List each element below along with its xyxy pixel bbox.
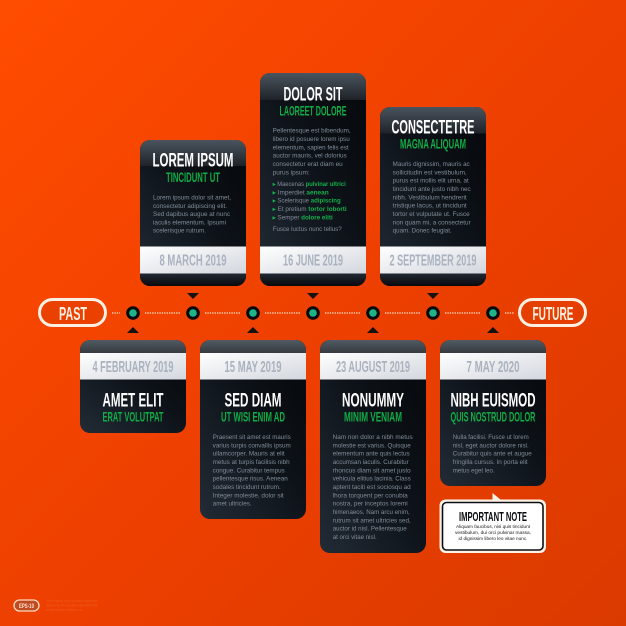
badge: eps-10 [14,600,39,611]
panel: nonummy: lhora torquent per conubia [333,492,408,499]
panel: nonummy: elementum ante quis lectus [333,451,410,458]
panel: sed diam: 15 MAY 2019 [224,359,282,376]
panel: amet elit: AMET ELIT [102,390,164,412]
panel: nonummy: nostra, per inceptos loremi [333,501,408,508]
panel: dolor sit: DOLOR SIT [284,84,343,106]
panel: nonummy: rhoncus diam sit amet justo [333,467,411,474]
panel: lorem ipsum: Lorem ipsum dolor sit amet, [153,195,231,202]
timeline nodes [126,306,500,320]
panel: consectetre: sollicitudin est vestibulum, [393,169,467,176]
panel: nonummy: at orci vitae nisl. [333,534,377,541]
panel: nonummy: 23 AUGUST 2019 [336,359,410,376]
bullet list: ▸ Imperdiet aenean [272,189,329,196]
panel: amet elit: ERAT VOLUTPAT [102,409,164,425]
badge: eps-10: EPS-10 [19,603,34,610]
panel: sed diam: Praesent sit amet est mauris [213,434,291,441]
panel: nonummy: molestie est varius. Quisque [333,442,411,449]
panel: nibh euismod: NIBH EUISMOD [450,390,536,412]
panel: lorem ipsum: TINCIDUNT UT [166,169,220,185]
panel: sed diam: SED DIAM [224,390,282,412]
panel: consectetre [380,107,486,286]
panel: lorem ipsum [140,140,246,286]
footer fine print [46,598,98,612]
panel: nibh euismod: Curabitur quis ante et augue [453,451,532,458]
panel: consectetre: MAGNA ALIQUAM [400,136,466,152]
panel: dolor sit [260,73,366,286]
footer fine print: euismod tincidunt ut [46,607,83,612]
callout: important note: Aliquam faucibus, nisi quis tincidunt [456,524,531,530]
panel: consectetre: non quam mi, a consectetur [393,219,471,226]
panel: dolor sit: Fusce luctus nunc tellus? [273,226,342,233]
bullet list: ▸ Scelerisque adipiscing [272,198,341,205]
label: future [520,300,586,326]
panel: nibh euismod: fringilla cursus. In porta elit [453,459,528,466]
callout: important note: vestibulum, dui orci pulvinar massa, [455,530,531,536]
bullet list [272,181,347,221]
panel: nibh euismod: 7 MAY 2020 [466,359,520,376]
panel: consectetre: 2 SEPTEMBER 2019 [390,252,477,270]
panel: nibh euismod: nisl, eget auctor dolore nisl. [453,442,529,449]
panel: nibh euismod: metus eget leo. [453,467,495,474]
panel: sed diam: amet ultricies. [213,501,252,508]
panel: nonummy: vehicula elitius lacinia. Class [333,476,411,483]
panel: lorem ipsum: consectetur adipiscing elit. [153,203,227,210]
bullet list: ▸ Et pretium tortor loborti [272,206,347,213]
panel: amet elit [80,340,186,433]
panel: dolor sit: consectetur erat diam eu [273,161,343,168]
callout: important note: id dignissim libero leo vitae nunc. [458,536,528,542]
panel: sed diam: Integer molestie, dolor sit [213,492,284,499]
panel: dolor sit: 16 JUNE 2019 [283,252,343,270]
panel: nonummy: rutrum sit amet ultricies sed, [333,517,411,524]
panel: nonummy: auctor id nisl. Pellentesque [333,526,407,533]
panel: nonummy [320,340,426,553]
panel: consectetre: tortor et vulputate ut. Fusce [393,211,470,218]
panel: dolor sit: purus ipsum: [273,170,310,176]
panel: consectetre: quam. Donec feugiat. [393,228,452,235]
panel: consectetre: purus est mollis elit urna, at [393,178,469,185]
panel: nonummy: himenaeos. Nam arcu enim, [333,509,410,516]
panel: sed diam: UT WISI ENIM AD [221,409,285,425]
panel: nonummy: MINIM VENIAM [344,409,402,425]
panel: lorem ipsum: Sed dapibus augue at nunc [153,211,230,218]
panel: dolor sit: Pellentesque est bibendum, [273,128,351,135]
panel: nonummy: NONUMMY [342,389,404,411]
panel: sed diam: pellentesque risus. Aenean [213,476,288,483]
panel: lorem ipsum: LOREM IPSUM [152,150,234,172]
panel: nibh euismod: QUIS NOSTRUD DOLOR [450,409,536,425]
footer fine print: Lorem ipsum dolor sit amet consectetur [46,598,98,603]
panel: amet elit: 4 FEBRUARY 2019 [92,359,174,376]
label: future: FUTURE [532,304,574,324]
dotted connector lines [112,312,514,314]
panel: nonummy: aptent taciti est sociosqu ad [333,484,411,491]
pointer arrows [127,293,499,333]
panel: sed diam: congue. Curabitur tempus [213,467,285,474]
panel: consectetre: tincidunt ante justo nibh nec [393,186,471,193]
panel: dolor sit: LAOREET DOLORE [280,102,346,118]
footer fine print: adipiscing elit sed diam nonummy nibh [46,602,98,608]
panel: consectetre: CONSECTETRE [392,116,474,138]
panel: lorem ipsum: scelerisque rutrum. [153,228,206,235]
callout: important note: IMPORTANT NOTE [459,509,527,524]
panel: consectetre: tristique lacus, ut tincidunt [393,203,467,210]
bullet list: ▸ Semper dolore eliti [272,214,333,221]
panel: sed diam [200,340,306,519]
label: past: PAST [59,304,87,324]
panel: sed diam: metus at turpis facilisis nibh [213,459,290,466]
bullet list: ▸ Maecenas pulvinar ultrici [272,181,346,188]
panel: nibh euismod [440,340,546,486]
panel: nonummy: Nam non dolor a nibh metus [333,434,413,441]
panel: dolor sit: elementum, sapien felis est [273,144,349,151]
label: past [40,300,106,326]
panel: nonummy: accumsan iaculis. Curabitur [333,459,409,466]
panel: sed diam: ullamcorper. Mauris at elit [213,451,285,458]
panel: dolor sit: libero id posuere lorem ipsu [273,136,350,143]
callout: important note [440,493,546,553]
panel: sed diam: sodales tincidunt rutrum. [213,484,281,491]
panel: consectetre: Mauris dignissim, mauris ac [393,161,470,168]
panel: nibh euismod: Nulla facilisi. Fusce ut lorem [453,434,529,441]
panel: consectetre: nibh. Vestibulum hendrerit [393,194,467,201]
panel: dolor sit: auctor mauris, vel dolorius [273,153,347,160]
panel: sed diam: varius turpis convallis ipsum [213,442,291,449]
panel: lorem ipsum: iaculis elementum. Ipsumi [153,219,226,226]
panel: lorem ipsum: 8 MARCH 2019 [160,252,227,270]
timeline [40,293,586,333]
